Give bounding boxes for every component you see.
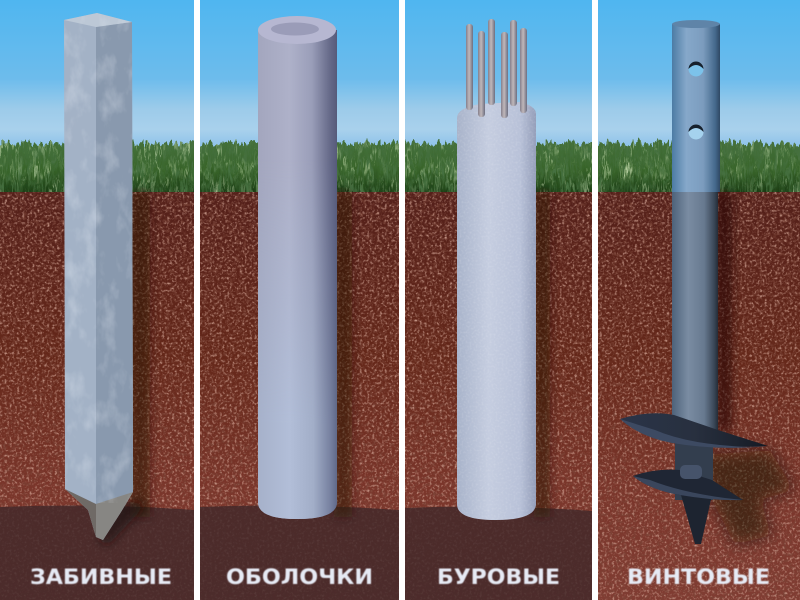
dark excavated soil band [0,506,194,600]
hole [688,124,704,140]
pile shadow [716,192,732,432]
lower helical blade [633,470,743,500]
dark excavated soil band [200,506,399,600]
icon: square concrete pile with pointed tip [64,13,134,540]
dark excavated soil band [405,507,592,600]
label: screw piles: ВИНТОВЫЕ [627,565,770,590]
icon: screw pile with helical blades [620,20,768,544]
label: bored piles: БУРОВЫЕ [437,565,560,590]
panel: bored pile [405,19,592,600]
upper helical blade [620,413,768,447]
pile shadow [130,192,150,517]
screw tip [681,495,712,544]
label: shell piles: ОБОЛОЧКИ [226,565,373,590]
tip shadow [98,500,146,545]
icon: bored concrete pile with reinforcing rods [457,19,537,521]
panel: shell pile [200,16,399,600]
helix shadow [700,450,795,545]
rear reinforcing rods [466,19,527,113]
front reinforcing rods [478,31,508,118]
panel: driven pile [0,13,194,600]
hole [688,62,704,76]
pile shadow [534,192,550,517]
divider lines [194,0,598,600]
panel: screw pile [620,20,795,545]
lower shaft [675,440,713,500]
label: driven piles: ЗАБИВНЫЕ [30,565,172,590]
panel background: sky [0,0,800,175]
pile shadow [334,192,352,517]
icon: hollow cylindrical shell pile [258,16,337,519]
panel background: grass [0,143,800,203]
panel background: soil [0,192,800,600]
